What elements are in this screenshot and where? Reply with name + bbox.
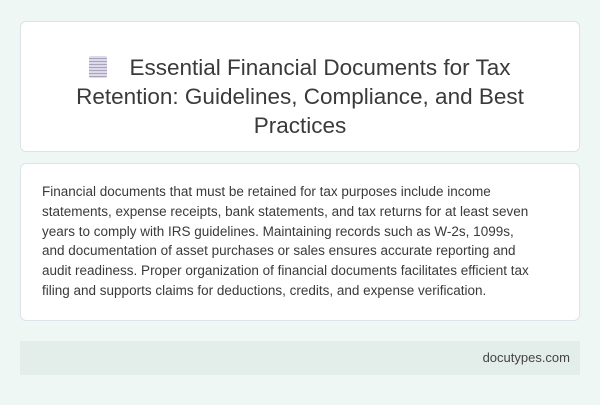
footer xyxy=(20,341,580,375)
title: Essential Financial Documents for Tax Retention: Guidelines, Compliance, and Best Practices xyxy=(76,55,524,138)
text block: Financial documents that must be retained for tax purposes include income statements, expense receipts, bank statements, and tax returns for at least seven years to comply with IRS guidelines. Maintaining records such as W-2s, 1099s, and documentation of asset purchases or sales ensures accurate reporting and audit readiness. Proper organization of financial documents facilitates efficient tax filing and supports claims for deductions, credits, and expense verification. xyxy=(42,184,529,298)
panel: header xyxy=(20,21,580,152)
icon: receipt xyxy=(89,56,107,78)
panel: description xyxy=(20,163,580,321)
footer text: docutypes.com xyxy=(483,350,570,365)
